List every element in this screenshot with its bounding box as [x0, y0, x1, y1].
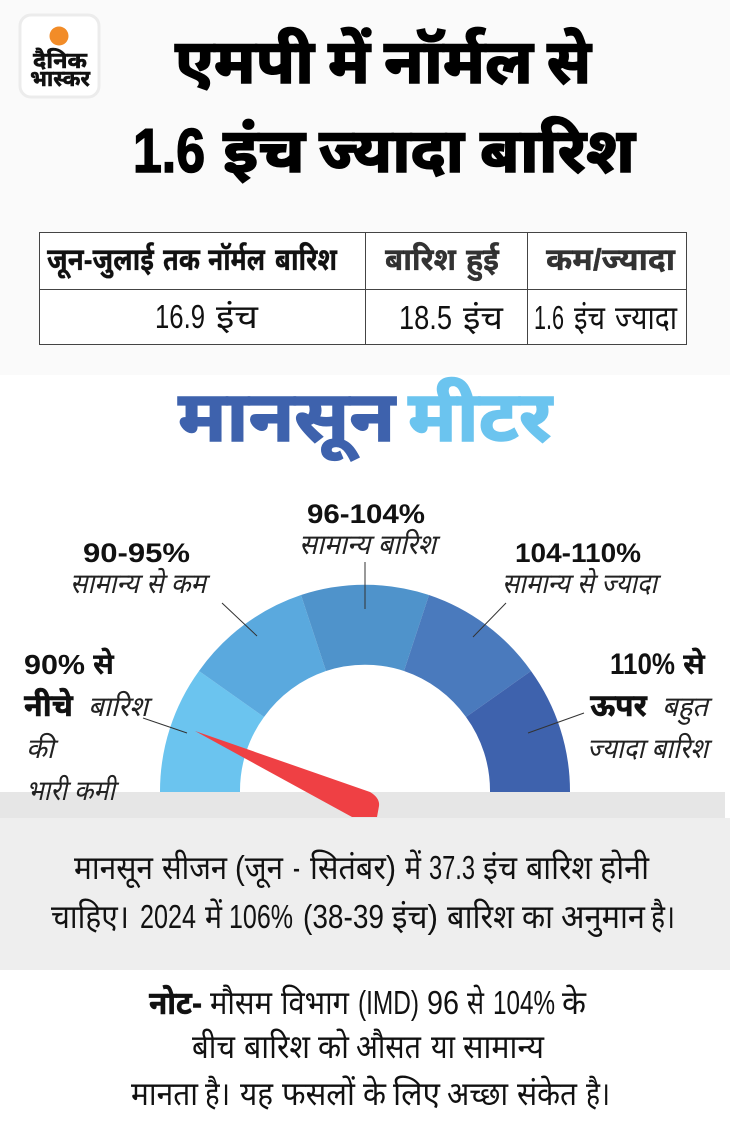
title: ज्यादा — [319, 117, 466, 186]
label: below 90%: से — [93, 646, 115, 681]
panel: monsoon season forecast: (38-39 — [303, 898, 384, 935]
table: normal vs actual rainfall: कम/ज्यादा — [546, 242, 676, 277]
table: normal vs actual rainfall: इंच — [574, 299, 606, 336]
panel: monsoon season forecast: में — [405, 849, 422, 886]
note text: विभाग — [281, 984, 350, 1021]
panel: monsoon season forecast: 106% — [229, 898, 293, 935]
label: 90-95%: सामान्य से कम — [70, 567, 211, 599]
label: 104-110%: सामान्य से ज्यादा — [502, 567, 661, 599]
note text: के — [562, 983, 587, 1021]
title — [133, 26, 636, 186]
table: normal vs actual rainfall: 18.5 — [399, 299, 452, 336]
logo: Dainik Bhaskar — [20, 15, 99, 97]
label: 104-110% — [502, 538, 661, 599]
panel: monsoon season forecast: - — [293, 849, 300, 886]
note text: यह — [240, 1075, 273, 1112]
leader lines — [143, 562, 584, 733]
table: normal vs actual rainfall: तक — [163, 242, 201, 277]
panel: monsoon season forecast: बारिश — [526, 849, 593, 886]
label: below 90%: भारी कमी — [26, 774, 119, 806]
label: 96-104% — [299, 499, 441, 560]
label: 96-104%: सामान्य बारिश — [299, 528, 441, 560]
table: normal vs actual rainfall: 1.6 — [534, 299, 564, 336]
table: normal vs actual rainfall: हुई — [466, 242, 500, 281]
note text: नोट- — [149, 985, 202, 1021]
label: below 90%: की — [26, 732, 59, 764]
panel: monsoon season forecast: होनी — [600, 849, 650, 886]
label: below 90% — [24, 646, 153, 806]
label: 96-104%: 96-104% — [307, 499, 425, 529]
note text: है। — [586, 1074, 610, 1112]
label: above 110% — [587, 646, 713, 764]
panel: monsoon season forecast: अनुमान — [561, 898, 646, 937]
panel: monsoon season forecast — [0, 818, 730, 970]
table: normal vs actual rainfall: जून-जुलाई — [47, 242, 155, 279]
note text: औसत — [356, 1028, 422, 1065]
label: above 110%: से — [683, 646, 706, 681]
title: से — [547, 26, 592, 97]
label: 90-95%: 90-95% — [83, 538, 190, 568]
panel: monsoon season forecast: बारिश — [447, 898, 515, 935]
table: normal vs actual rainfall: ज्यादा — [615, 299, 678, 336]
logo: Dainik Bhaskar: दैनिक — [33, 47, 88, 73]
table: normal vs actual rainfall: 16.9 — [155, 298, 205, 335]
label: above 110%: बहुत — [662, 691, 713, 725]
needle — [195, 731, 379, 817]
label: above 110%: ऊपर — [590, 688, 648, 723]
note text: या — [431, 1028, 456, 1065]
table: normal vs actual rainfall: इंच — [463, 299, 504, 336]
table: normal vs actual rainfall: बारिश — [385, 242, 456, 277]
title: 1.6 — [133, 117, 205, 186]
panel: monsoon season forecast: 2024 — [140, 898, 196, 935]
title: बारिश — [480, 116, 636, 186]
panel: monsoon season forecast: (जून — [235, 849, 284, 888]
label: 104-110%: 104-110% — [515, 538, 641, 568]
note text: अच्छा — [447, 1075, 509, 1112]
note text: लिए — [393, 1075, 441, 1112]
title: इंच — [223, 117, 306, 186]
panel: monsoon season forecast: सितंबर) — [310, 849, 396, 886]
note text: है। — [205, 1074, 230, 1112]
note text: बीच — [192, 1028, 236, 1065]
table: normal vs actual rainfall: इंच — [216, 298, 259, 335]
panel: monsoon season forecast: मानसून — [74, 849, 154, 888]
panel: monsoon season forecast: का — [522, 898, 554, 935]
note text: के — [363, 1074, 387, 1112]
heading: monsoon meter — [178, 378, 554, 461]
label: 90-95% — [70, 538, 211, 599]
heading: monsoon meter: मानसून — [178, 378, 396, 461]
heading: monsoon meter: मीटर — [408, 378, 554, 457]
panel: monsoon season forecast: इंच — [483, 849, 518, 886]
label: below 90%: नीचे — [24, 688, 74, 723]
title: एमपी — [175, 27, 316, 97]
note text: बारिश — [244, 1028, 311, 1065]
table: normal vs actual rainfall: बारिश — [275, 242, 337, 277]
note text — [131, 983, 610, 1112]
panel: monsoon season forecast: में — [205, 898, 223, 935]
panel: monsoon season forecast: चाहिए। — [51, 898, 129, 935]
table: normal vs actual rainfall — [39, 232, 687, 345]
panel: monsoon season forecast: सीजन — [162, 849, 228, 886]
label: above 110%: ज्यादा बारिश — [587, 732, 713, 764]
note text: फसलों — [282, 1075, 356, 1112]
note text: को — [318, 1028, 350, 1065]
note text: सामान्य — [463, 1028, 545, 1065]
note text: (IMD) — [358, 984, 419, 1021]
panel: monsoon season forecast: इंच) — [392, 898, 438, 935]
title: नॉर्मल — [384, 27, 534, 97]
label: below 90%: 90% — [24, 649, 85, 680]
note text: मानता — [131, 1075, 199, 1112]
label: below 90%: बारिश — [88, 690, 153, 722]
label: above 110%: 110% — [610, 648, 675, 681]
title: में — [328, 27, 372, 97]
note text: 96 — [427, 984, 459, 1021]
panel: monsoon season forecast: है। — [651, 897, 675, 935]
note text: मौसम — [210, 984, 273, 1021]
gauge: five rainfall segments — [160, 585, 570, 792]
logo: Dainik Bhaskar: भास्कर — [30, 66, 91, 91]
note text: से — [467, 983, 485, 1021]
note text: 104% — [493, 984, 555, 1021]
note text: संकेत — [517, 1074, 578, 1112]
grey band behind gauge base — [0, 792, 725, 819]
panel: monsoon season forecast: 37.3 — [429, 849, 475, 886]
table: normal vs actual rainfall: नॉर्मल — [208, 242, 266, 277]
